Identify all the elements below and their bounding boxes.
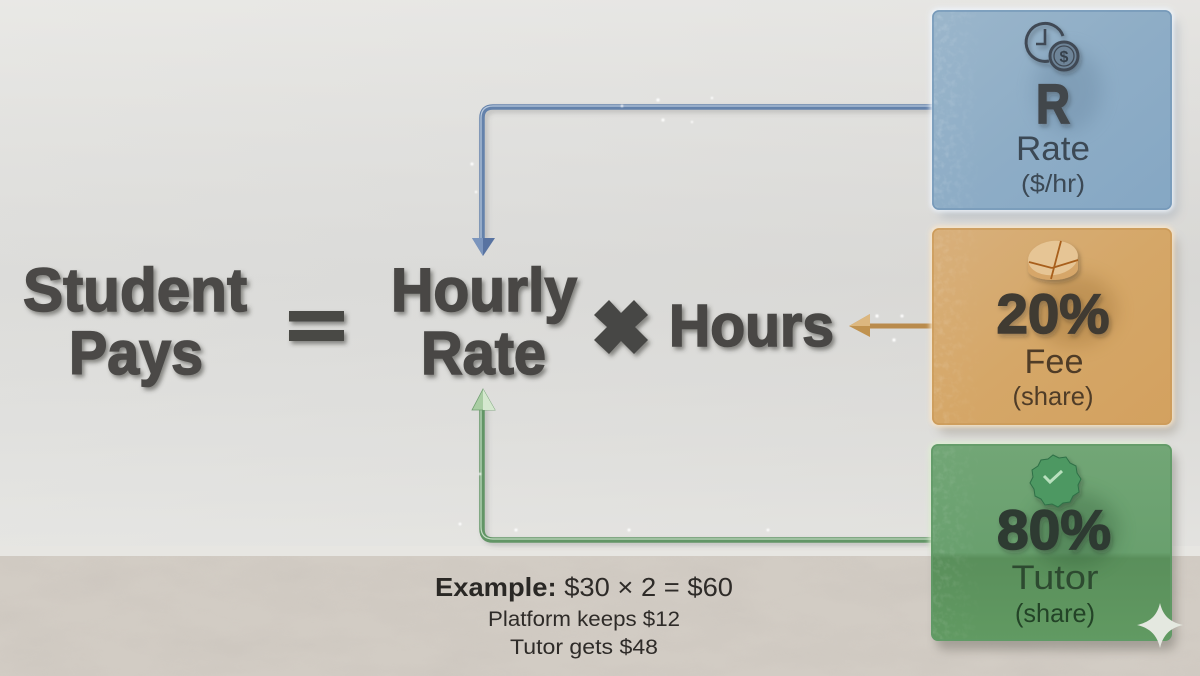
panel text: Rate: ($/hr) <box>1021 170 1085 198</box>
equation: Hourly Rate: Rate <box>421 319 546 387</box>
panel text: Tutor: (share) <box>1015 598 1095 628</box>
panel text: Tutor: 80% <box>997 498 1111 561</box>
panel: Rate <box>930 8 1178 218</box>
panel text: Tutor <box>997 498 1111 628</box>
equation: Hours: Hours <box>669 293 834 359</box>
icon: pie token <box>1026 238 1080 280</box>
equation: equals sign <box>289 311 344 341</box>
panel text: Fee: 20% <box>996 282 1110 345</box>
example text block: Tutor gets $48 <box>510 636 658 659</box>
equation: Student Pays <box>23 256 247 387</box>
arrow: fee to hours <box>849 314 935 337</box>
panel text: Rate: R <box>1036 72 1070 135</box>
sparkles along arrows <box>459 97 904 532</box>
equation: multiply sign <box>594 300 648 354</box>
background: stone floor <box>0 556 1200 676</box>
panel text: Fee: Fee <box>1024 343 1084 381</box>
example text block <box>435 572 733 659</box>
panel text: Rate <box>1016 72 1090 198</box>
panel text: Fee <box>996 282 1110 411</box>
panel text: Tutor: Tutor <box>1012 559 1098 597</box>
example text block: Example: $30 × 2 = $60 <box>435 572 733 602</box>
arrow: rate to hourly rate <box>472 106 935 256</box>
equation: Student Pays: Pays <box>69 319 203 387</box>
panel text: Rate: Rate <box>1016 130 1090 168</box>
arrow: tutor to hourly rate <box>472 389 935 543</box>
icon: clock and coin <box>1026 23 1078 70</box>
equation: Hourly Rate: Hourly <box>391 256 577 324</box>
panel text: Fee: (share) <box>1012 381 1094 411</box>
equation: Student Pays: Student <box>23 256 247 324</box>
equation: Hourly Rate <box>391 256 577 387</box>
icon: check badge <box>1030 455 1081 507</box>
example text block: Platform keeps $12 <box>488 608 680 631</box>
icon: clock and coin: $ <box>1060 49 1069 66</box>
panel: Fee <box>930 226 1178 434</box>
icon: sparkle watermark <box>1137 603 1183 648</box>
panel: Tutor <box>929 442 1176 650</box>
